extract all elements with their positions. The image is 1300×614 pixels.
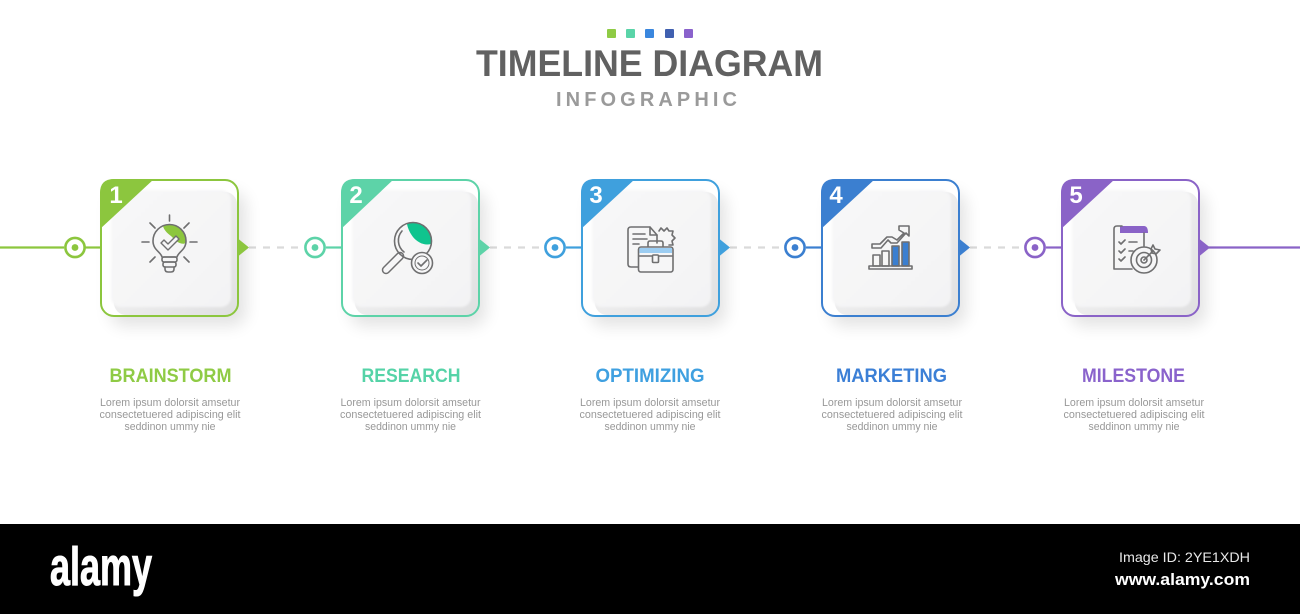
- text block: brainstorm description: [100, 397, 240, 433]
- text block: optimizing description: Lorem ipsum dolorsit amsetur: [580, 397, 720, 409]
- panel: step 4 marketing: [821, 179, 970, 326]
- label: brainstorm: [100, 366, 240, 433]
- panel: step 4 marketing: 4: [829, 182, 843, 209]
- panel: step 2 research: [341, 179, 490, 326]
- icon: growth chart: [869, 226, 912, 269]
- panel: step 2 research: 2: [349, 182, 363, 209]
- icon: magnifier: [386, 222, 432, 274]
- panel: step 3 optimizing: 3: [589, 182, 603, 209]
- text block: brainstorm description: Lorem ipsum dolorsit amsetur: [100, 397, 240, 409]
- text block: marketing description: consectetuered adipiscing elit: [822, 409, 962, 421]
- text block: marketing description: seddinon ummy nie: [846, 421, 938, 433]
- text block: milestone description: [1064, 397, 1204, 433]
- icon: light bulb: [142, 215, 197, 272]
- panel: step 1 brainstorm: [100, 179, 249, 326]
- panel: step 3 optimizing: [581, 179, 730, 326]
- label: brainstorm: BRAINSTORM: [110, 366, 232, 387]
- label: research: [340, 366, 481, 433]
- text block: milestone description: consectetuered adipiscing elit: [1064, 409, 1204, 421]
- text block: optimizing description: [580, 397, 720, 433]
- panel: step 5 milestone: 5: [1069, 182, 1083, 209]
- label: research: RESEARCH: [362, 366, 460, 387]
- image id: Image ID: 2YE1XDH: [1119, 549, 1250, 565]
- label: optimizing: OPTIMIZING: [596, 366, 704, 387]
- logo: alamy: alamy: [50, 537, 152, 597]
- text block: brainstorm description: consectetuered adipiscing elit: [100, 409, 240, 421]
- panel: step 1 brainstorm: 1: [109, 182, 123, 209]
- label: milestone: [1064, 366, 1204, 433]
- panel: step 5 milestone: [1061, 179, 1210, 326]
- text block: research description: consectetuered adipiscing elit: [340, 409, 481, 421]
- website: www.alamy.com: [1114, 570, 1250, 589]
- text block: research description: [340, 397, 481, 433]
- label: marketing: MARKETING: [836, 366, 947, 387]
- text block: optimizing description: consectetuered adipiscing elit: [580, 409, 720, 421]
- icon: checklist and target: [1114, 226, 1160, 273]
- text block: milestone description: Lorem ipsum dolorsit amsetur: [1064, 397, 1204, 409]
- text block: marketing description: Lorem ipsum dolorsit amsetur: [822, 397, 962, 409]
- footer banner: [0, 524, 1300, 614]
- icon: document, gear and briefcase: [628, 227, 675, 272]
- timeline connector: [0, 246, 1300, 249]
- title: TIMELINE DIAGRAM: [476, 43, 823, 84]
- text block: marketing description: [822, 397, 962, 433]
- text block: optimizing description: seddinon ummy nie: [604, 421, 696, 433]
- label: milestone: MILESTONE: [1082, 366, 1185, 387]
- header colour dots: [607, 29, 693, 38]
- text block: research description: Lorem ipsum dolorsit amsetur: [340, 397, 481, 409]
- text block: milestone description: seddinon ummy nie: [1088, 421, 1180, 433]
- label: optimizing: [580, 366, 720, 433]
- text block: research description: seddinon ummy nie: [365, 421, 456, 433]
- label: marketing: [822, 366, 962, 433]
- node markers: [65, 238, 1045, 257]
- text block: brainstorm description: seddinon ummy nie: [124, 421, 216, 433]
- subtitle: INFOGRAPHIC: [556, 89, 737, 111]
